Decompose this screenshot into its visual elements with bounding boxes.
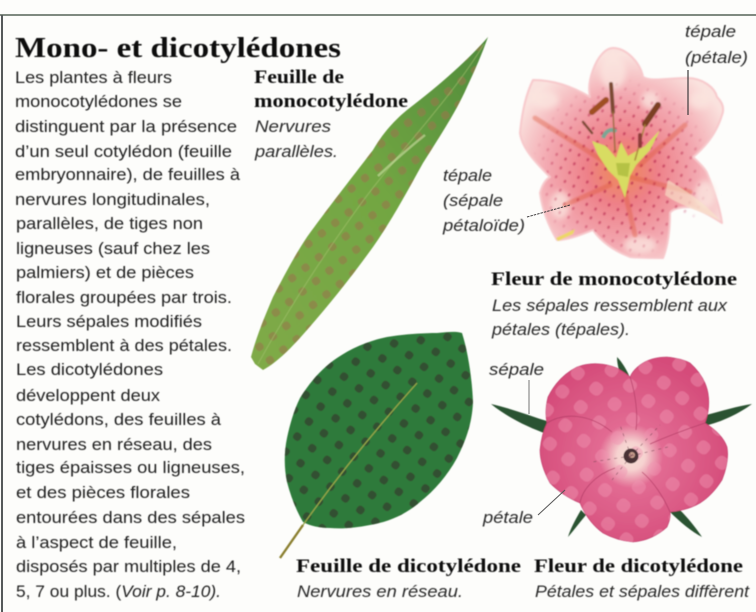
label: tépale (pétale): (pétale) [685, 49, 748, 67]
petal streaks [535, 118, 690, 235]
heading: dicot flower [534, 557, 751, 601]
text block: main description: palmiers) et de pièces [16, 263, 194, 282]
icon: monocot leaf [251, 37, 488, 370]
label: tépale (sépale pétaloïde): pétaloïde) [442, 217, 525, 235]
heading: dicot flower: Fleur de dicotylédone [534, 557, 743, 577]
text block: main description: embryonnaire), de feuilles à [15, 165, 241, 184]
sepals [491, 357, 752, 537]
heading: monocot flower [491, 270, 737, 339]
label: pétale [482, 490, 565, 527]
heading: monocot flower: Les sépales ressemblent aux [492, 297, 728, 315]
label: tépale (sépale pétaloïde) [442, 167, 570, 235]
text block: main description: nervures en réseau, des [16, 435, 212, 454]
heading: monocot leaf [254, 68, 408, 161]
icon: dicot leaf [280, 332, 473, 558]
label: pétale: pétale [482, 509, 533, 527]
label: tépale (sépale pétaloïde): (sépale [443, 192, 503, 210]
heading: monocot leaf: Nervures [255, 118, 331, 136]
icon: lily flower [520, 48, 723, 258]
text block: main description: Les dicotylédones [16, 360, 163, 379]
text block: main description: Leurs sépales modifiés [16, 312, 202, 331]
heading: dicot leaf: Nervures en réseau. [297, 583, 463, 601]
text block: main description: cotylédons, des feuilles à [16, 410, 222, 429]
text block: main description: tiges épaisses ou ligneuses, [16, 458, 245, 477]
petal edges [547, 377, 705, 512]
pale mottling [531, 55, 715, 254]
flower center [624, 448, 638, 464]
text block: main description: ligneuses (sauf chez les [16, 239, 210, 258]
text block: main description [15, 68, 245, 601]
label: tépale (pétale): tépale [685, 23, 736, 41]
text block: main description: d’un seul cotylédon (feuille [15, 142, 232, 161]
label: tépale (pétale) [685, 23, 748, 115]
flower silhouette [520, 48, 723, 258]
text block: main description: disposés par multiples de 4, [16, 557, 241, 576]
text block: main description: et des pièces florales [16, 483, 190, 502]
title: Mono- et dicotylédones [15, 32, 341, 64]
text block: main description: monocotylédones se [15, 92, 182, 111]
heading: monocot flower: pétales (tépales). [491, 321, 630, 339]
label: sépale: sépale [489, 361, 544, 379]
petal speckles [538, 83, 704, 256]
text block: main description: distinguent par la présence [15, 117, 237, 136]
label: tépale (sépale pétaloïde): tépale [443, 167, 492, 185]
flower silhouette [540, 357, 728, 542]
text block: main description: entourées dans des sépales [16, 508, 245, 527]
text block: main description: nervures longitudinales, [15, 190, 210, 209]
heading: dicot flower: Pétales et sépales diffèrent [535, 583, 751, 601]
label: sépale [489, 361, 544, 414]
heading: monocot leaf: monocotylédone [254, 92, 408, 112]
text block: main description: parallèles, de tiges non [16, 214, 203, 233]
heading: dicot leaf: Feuille de dicotylédone [296, 557, 521, 577]
text block: main description: Les plantes à fleurs [15, 68, 172, 87]
heading: monocot leaf: parallèles. [254, 143, 338, 161]
petal mottling [540, 357, 728, 542]
text block: main description: à l’aspect de feuille, [16, 533, 177, 552]
heading: dicot leaf [296, 557, 521, 601]
text block: main description: développent deux [16, 386, 161, 405]
stamens [583, 84, 658, 160]
icon: dicot flower [491, 357, 752, 542]
flower center [592, 130, 660, 198]
text block: main description: 5, 7 ou plus. (Voir p. 8-10). [16, 582, 221, 601]
heading: monocot flower: Fleur de monocotylédone [491, 270, 737, 290]
text block: main description: ressemblent à des pétales. [16, 336, 232, 355]
text block: main description: florales groupées par trois. [16, 288, 232, 307]
heading: monocot leaf: Feuille de [254, 68, 344, 88]
